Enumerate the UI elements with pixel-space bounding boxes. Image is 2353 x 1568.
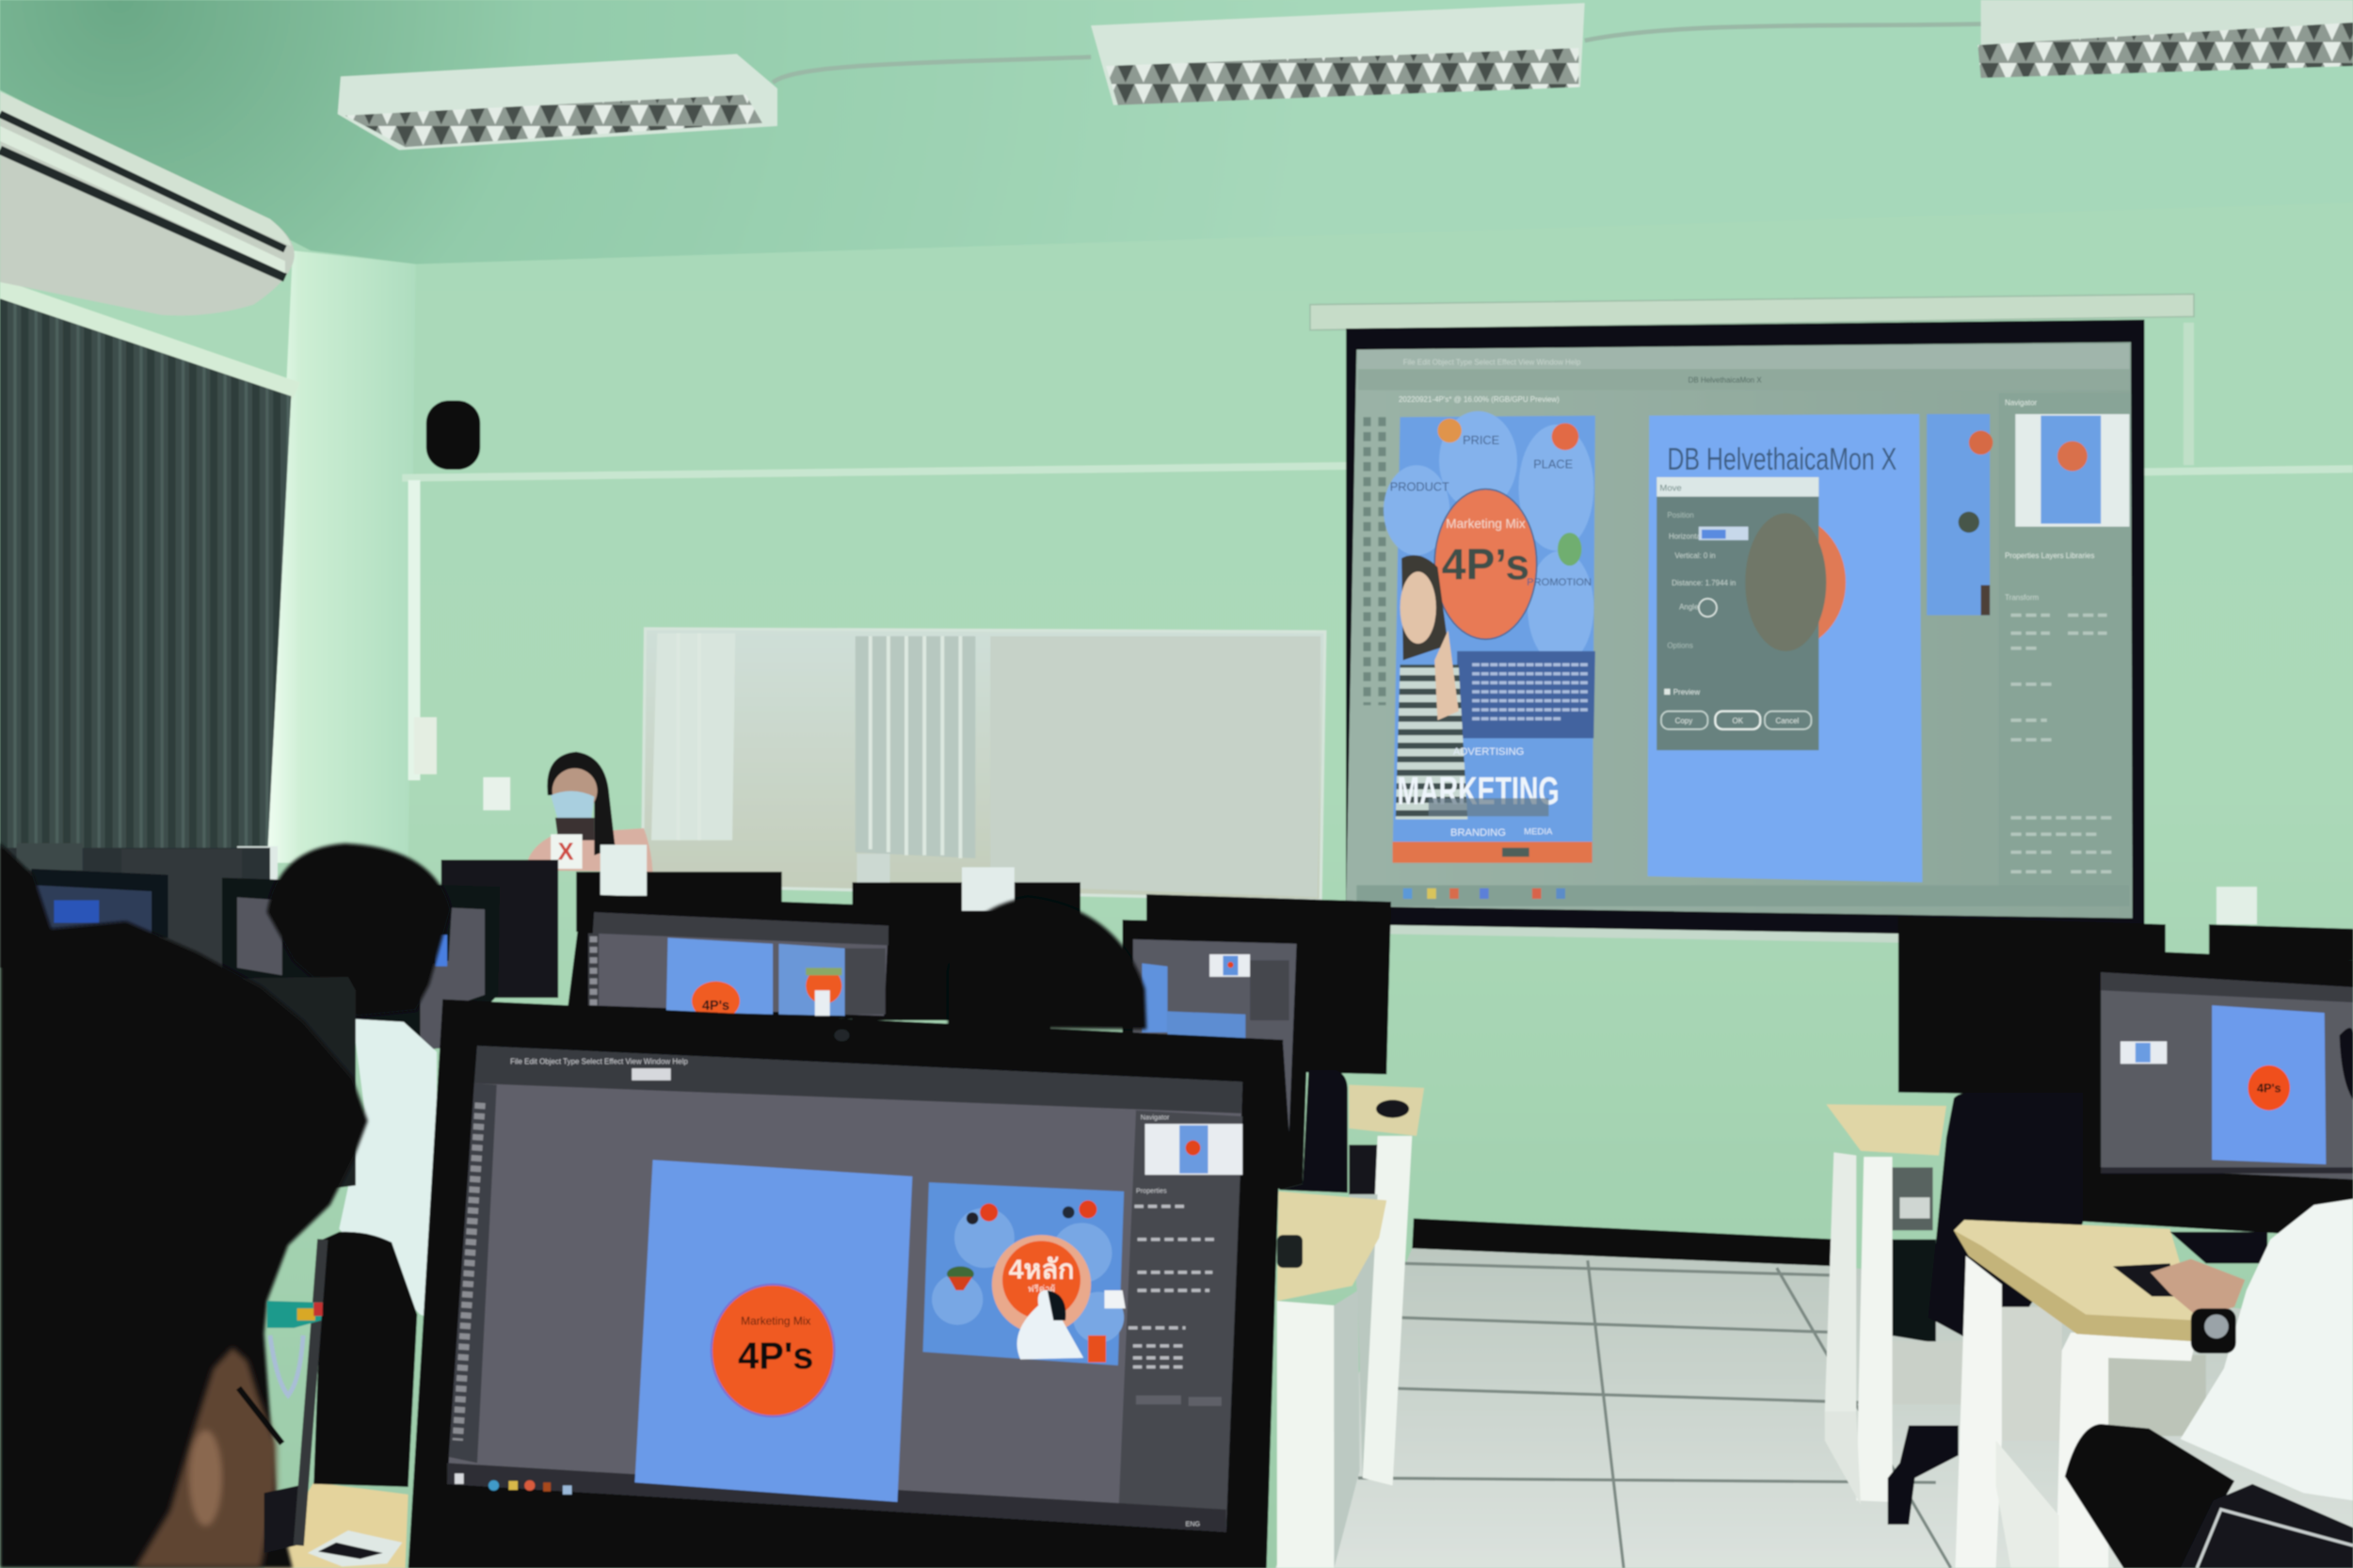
poster on screen: Marketing Mix [1446, 517, 1526, 531]
projector screen casing [1310, 294, 2194, 330]
mini poster: 4หลัก [1009, 1255, 1074, 1285]
paper cards [237, 845, 2257, 924]
monitor right centre [1123, 920, 1311, 1190]
centre desk [1277, 1192, 1386, 1568]
back desk [1349, 1085, 1424, 1485]
move dialog: OK [1733, 716, 1744, 725]
monitor back centre [568, 894, 904, 1020]
taskbar icons: ENG [1186, 1520, 1201, 1528]
move dialog [1657, 477, 1826, 750]
ceiling light 2 [1091, 3, 1585, 105]
far left monitors [0, 843, 270, 984]
mini poster: ฟรีค่าผู้ [1028, 1284, 1055, 1295]
air conditioner [0, 91, 295, 315]
right desk front [1954, 1220, 2267, 1568]
tool column [1367, 417, 1382, 705]
front monitor screen [447, 1046, 1242, 1532]
navigator and properties [1128, 1113, 1242, 1406]
poster on screen [1384, 411, 1595, 863]
move dialog: Angle: [1679, 602, 1701, 611]
application bars [1356, 344, 2129, 906]
navigator and properties: Properties [1136, 1187, 1167, 1194]
poster on screen: MARKETING [1397, 769, 1560, 813]
monitor behind student 2 [222, 878, 500, 1050]
properties panel: Navigator [2005, 398, 2038, 407]
front monitor [408, 1000, 1283, 1568]
move dialog: Move [1659, 483, 1682, 493]
right desk rear [1825, 1104, 1966, 1505]
poster on screen: PRODUCT [1390, 479, 1449, 493]
properties panel: Transform [2005, 594, 2039, 602]
artboard on screen: DB HelvethaicaMon X [1667, 442, 1897, 477]
projector screen frame [1346, 320, 2144, 947]
right chair [1888, 1093, 2083, 1525]
move dialog: Cancel [1776, 716, 1800, 725]
teacher [525, 752, 653, 872]
conduit [773, 24, 1981, 83]
monitor back centre: 4P's [702, 999, 729, 1014]
poster on screen: PRICE [1463, 433, 1499, 447]
mini poster [923, 1182, 1126, 1366]
teacher lectern cards [551, 834, 583, 869]
wall rail [402, 323, 2353, 780]
move dialog: Distance: 1.7944 in [1672, 579, 1736, 587]
third poster on screen [1927, 414, 1993, 616]
poster on screen: PROMOTION [1527, 577, 1592, 588]
ceiling [0, 0, 2353, 264]
properties panel [1999, 393, 2131, 886]
monitor left of head 3 [949, 911, 1050, 1030]
front student head [0, 843, 368, 1568]
student 2 [267, 843, 450, 1320]
artboard with circle: 4P's [738, 1336, 813, 1377]
poster on screen: 4P’s [1442, 539, 1529, 588]
move dialog: Copy [1675, 716, 1692, 725]
application bars: 20220921-4P's* @ 16.00% (RGB/GPU Preview) [1399, 395, 1560, 404]
ceiling light 1 [338, 54, 777, 150]
teacher lectern cards: X [558, 840, 574, 866]
move dialog: Preview [1673, 688, 1700, 696]
poster on screen: BRANDING [1450, 827, 1506, 839]
front monitor screen: File Edit Object Type Select Effect View Window Help [510, 1057, 688, 1065]
application bars: DB HelvethaicaMon X [1689, 376, 1762, 385]
right rear monitor [2081, 949, 2353, 1238]
side column by window [264, 250, 416, 863]
chair left of front monitor [313, 1232, 417, 1487]
ceiling light 3 [1977, 0, 2353, 78]
move dialog: Position [1667, 511, 1694, 520]
poster on screen: MEDIA [1524, 826, 1553, 837]
floor [1275, 1219, 2353, 1568]
artboard on screen [1648, 414, 1922, 882]
head centre [949, 897, 1146, 1030]
move dialog: Options [1667, 642, 1693, 650]
front left monitor back [240, 977, 356, 1200]
application bars: File Edit Object Type Select Effect View Window Help [1403, 358, 1581, 366]
projected screen [1346, 342, 2133, 919]
taskbar icons [455, 1474, 1201, 1528]
navigator and properties: Navigator [1141, 1113, 1170, 1121]
artboard with circle [634, 1160, 912, 1502]
artboard with circle: Marketing Mix [741, 1315, 810, 1328]
chair between desks [1280, 1070, 1348, 1192]
speaker [426, 401, 480, 470]
wall switches and thermostat [414, 717, 510, 810]
properties panel: Properties Layers Libraries [2005, 552, 2094, 560]
back monitors row (black backs) [441, 860, 2353, 1096]
move dialog: Vertical: 0 in [1674, 552, 1716, 560]
right rear monitor: 4P's [2257, 1081, 2281, 1096]
right student [2065, 1199, 2353, 1568]
poster on screen: ADVERTISING [1453, 746, 1524, 758]
poster on screen: PLACE [1533, 456, 1573, 471]
left desk corner [264, 1482, 408, 1568]
move dialog: Horizontal: [1669, 532, 1705, 540]
window blinds [0, 280, 300, 863]
whiteboard [642, 629, 1325, 901]
